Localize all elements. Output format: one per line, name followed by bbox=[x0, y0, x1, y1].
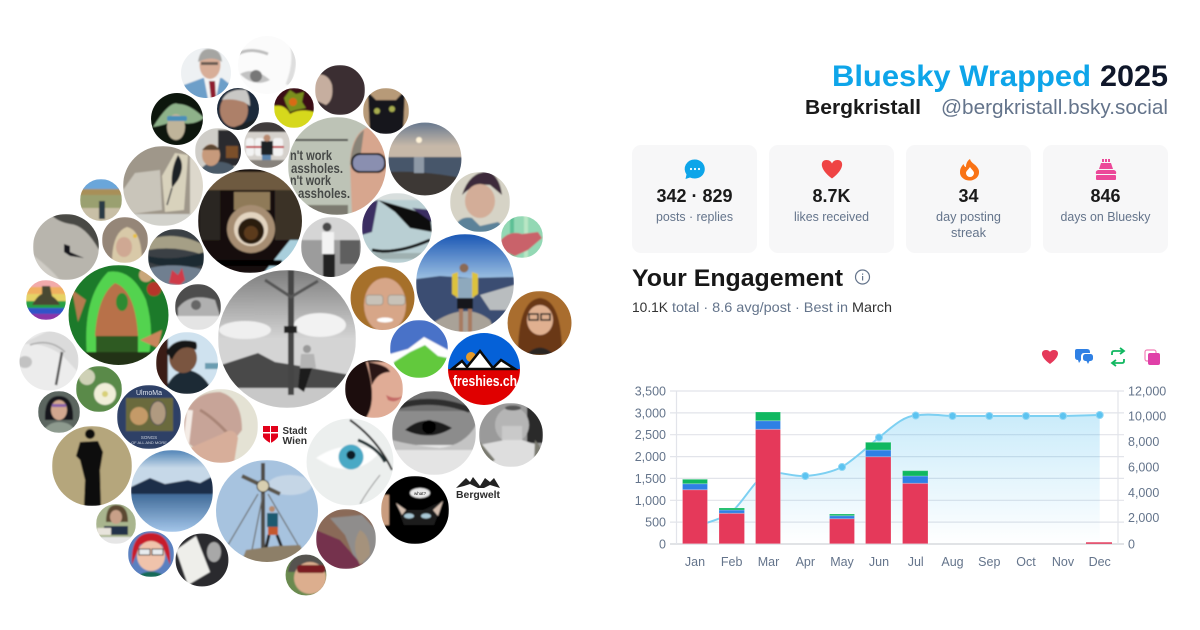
avatar: book and feather bbox=[123, 146, 204, 226]
stat value: 34 bbox=[958, 186, 978, 206]
avatar: blue eye close-up bbox=[306, 418, 394, 506]
avatar: blonde woman bbox=[102, 217, 148, 263]
avatar: summit cross black and white bbox=[218, 270, 356, 408]
avatar: hair and plaid shirt bbox=[316, 509, 376, 569]
engagement summary bbox=[632, 299, 892, 315]
avatar: climber on rock bbox=[33, 214, 99, 280]
avatar: sleeping figure bbox=[175, 284, 221, 330]
left axis labels: 2,500 bbox=[635, 428, 666, 442]
cumulative area bbox=[695, 415, 1100, 544]
stat label: day posting bbox=[936, 209, 1001, 224]
left axis labels: 0 bbox=[659, 538, 666, 552]
avatar: green christmas portrait bbox=[68, 265, 170, 367]
avatar: white roses bbox=[76, 366, 122, 412]
bar: Dec bbox=[1086, 542, 1112, 544]
avatar: curly haired man with glasses bbox=[350, 266, 416, 332]
month labels: Jul bbox=[908, 555, 924, 569]
left axis labels: 3,500 bbox=[635, 384, 666, 398]
logo: blue and green hills bbox=[390, 320, 448, 378]
avatar: monkey with mirror bbox=[117, 385, 181, 449]
stat value: 342 · 829 bbox=[656, 186, 732, 206]
engagement summary: total · 8.6 avg/post · Best in bbox=[672, 299, 848, 315]
handle: @bergkristall.bsky.social bbox=[941, 97, 1168, 119]
title year: 2025 bbox=[1100, 60, 1168, 93]
avatar: man and sign with text: n't work bbox=[290, 172, 331, 188]
right axis labels: 4,000 bbox=[1128, 486, 1159, 500]
month labels: Jun bbox=[869, 555, 889, 569]
right axis labels bbox=[1128, 384, 1166, 552]
month labels: Dec bbox=[1089, 555, 1111, 569]
avatar: black and white neck bbox=[479, 403, 543, 467]
panel: likes received bbox=[769, 145, 894, 253]
icon: replies legend bbox=[1075, 349, 1093, 364]
avatar: black cat bbox=[363, 88, 409, 134]
grid lines bbox=[670, 391, 1124, 544]
logo: Stadt Wien: Wien bbox=[282, 435, 307, 447]
avatar: black and white eye bbox=[392, 391, 476, 475]
avatar: open book and grey cat bbox=[175, 533, 229, 587]
avatar: monkey with mirror: OF ALL AND MORE bbox=[131, 440, 167, 445]
engagement summary: 10.1K bbox=[632, 299, 669, 315]
avatar: green hat bbox=[150, 92, 204, 146]
icon: quotes legend bbox=[1145, 350, 1160, 365]
avatar: man and sign with text: assholes. bbox=[291, 160, 343, 176]
heading: your engagement: Your Engagement bbox=[632, 265, 843, 292]
display name: Bergkristall bbox=[805, 97, 921, 119]
avatar: black cat with speech bubble bbox=[381, 476, 449, 544]
month labels: Apr bbox=[796, 555, 815, 569]
avatar: smiling woman bbox=[450, 172, 510, 232]
left axis labels: 500 bbox=[645, 516, 666, 530]
stat value: 846 bbox=[1090, 186, 1120, 206]
stat label second line: streak bbox=[951, 225, 986, 240]
avatar: long dark hair bbox=[315, 65, 365, 115]
panel: day posting streak bbox=[906, 145, 1031, 253]
right axis labels: 6,000 bbox=[1128, 460, 1159, 474]
icon: reposts legend bbox=[1112, 348, 1124, 366]
month labels: Nov bbox=[1052, 555, 1075, 569]
avatar: vintage camera bbox=[198, 169, 303, 275]
left axis labels: 1,000 bbox=[635, 494, 666, 508]
avatar: woman reading bbox=[96, 504, 136, 544]
avatar: older man bbox=[217, 88, 259, 130]
avatar: black cat with speech bubble: what? bbox=[414, 491, 426, 496]
avatar: man and sign with text: assholes. bbox=[298, 185, 350, 201]
avatar: rainbow flag silhouette bbox=[26, 280, 66, 320]
bar: May bbox=[830, 514, 854, 544]
right axis labels: 12,000 bbox=[1128, 384, 1166, 398]
panel: posts and replies bbox=[632, 145, 757, 253]
logo: freshies.ch: freshies.ch bbox=[453, 374, 517, 390]
chart legend bbox=[1042, 348, 1160, 366]
logo: Stadt Wien: Stadt bbox=[282, 425, 307, 437]
avatar: young man and train bbox=[195, 128, 242, 174]
title: Bluesky Wrapped bbox=[832, 60, 1091, 93]
avatar: man in blue suit bbox=[181, 48, 231, 98]
left axis labels bbox=[635, 384, 666, 552]
avatar: pale face in grey bbox=[18, 330, 79, 391]
month labels: Aug bbox=[941, 555, 964, 569]
stat label: posts · replies bbox=[656, 209, 733, 224]
avatar: man and sign with text bbox=[288, 117, 392, 215]
month labels: Feb bbox=[721, 555, 743, 569]
logo: Stadt Wien bbox=[263, 425, 307, 447]
avatar: woman on mountain bbox=[416, 234, 514, 332]
avatar: red dog drawing bbox=[501, 216, 543, 258]
avatar: monkey with mirror: SONGS bbox=[141, 435, 157, 440]
chart: monthly engagement bbox=[635, 384, 1166, 569]
logo: Bergwelt bbox=[456, 477, 500, 501]
month labels: Mar bbox=[758, 555, 779, 569]
avatar: smiling woman close-up bbox=[345, 360, 403, 418]
icon: info bbox=[856, 270, 870, 284]
avatar: cartoon woman with glasses bbox=[507, 291, 573, 357]
avatar: dark haired person by water bbox=[156, 332, 219, 394]
icon: flame bbox=[960, 159, 979, 181]
stat label: likes received bbox=[794, 209, 869, 224]
right axis labels: 10,000 bbox=[1128, 410, 1166, 424]
icon: heart bbox=[822, 160, 842, 178]
avatar: sea at sunset bbox=[388, 122, 462, 196]
left axis labels: 2,000 bbox=[635, 450, 666, 464]
avatar: red sunglasses bbox=[285, 554, 327, 596]
engagement summary: March bbox=[852, 299, 892, 315]
panel: days on Bluesky bbox=[1043, 145, 1168, 253]
avatar: eye sketch bbox=[240, 48, 296, 86]
right axis labels: 2,000 bbox=[1128, 511, 1159, 525]
avatar: yellow flower bbox=[274, 88, 314, 128]
bar: Mar bbox=[756, 412, 780, 544]
month labels bbox=[685, 555, 1111, 569]
logo: Bergwelt: Bergwelt bbox=[456, 489, 500, 501]
left axis labels: 3,000 bbox=[635, 406, 666, 420]
avatar: man at summit cross bbox=[215, 460, 319, 565]
avatar: man on seats bbox=[244, 122, 290, 168]
stat value: 8.7K bbox=[812, 186, 850, 206]
icon: speech bubble bbox=[685, 159, 705, 179]
logo: freshies.ch bbox=[448, 333, 520, 405]
avatar: man in white shirt bbox=[301, 217, 361, 278]
month labels: Jan bbox=[685, 555, 705, 569]
icon: cake bbox=[1096, 159, 1116, 180]
avatar: man and sign with text: n't work bbox=[290, 147, 332, 163]
icon: likes legend bbox=[1042, 350, 1058, 364]
avatar: woman with purple glasses bbox=[38, 391, 80, 433]
avatar: comic girl bbox=[362, 193, 432, 263]
right axis labels: 0 bbox=[1128, 538, 1135, 552]
avatar: cartoon red hair bbox=[128, 531, 174, 577]
avatar: dune walker bbox=[80, 179, 122, 222]
bar: Jul bbox=[902, 471, 928, 544]
stat label: days on Bluesky bbox=[1060, 209, 1151, 224]
month labels: Sep bbox=[978, 555, 1000, 569]
avatar: mountain lake bbox=[131, 450, 213, 532]
left axis labels: 1,500 bbox=[635, 472, 666, 486]
avatar: monkey with mirror: UlmoMa bbox=[136, 390, 162, 397]
month labels: May bbox=[830, 555, 855, 569]
cumulative line bbox=[695, 415, 1100, 527]
avatar: long shadow on ground bbox=[52, 426, 132, 506]
bar: Feb bbox=[719, 508, 744, 544]
bar: Jan bbox=[682, 479, 708, 544]
avatar: blonde pink hair from behind bbox=[184, 389, 258, 463]
line markers bbox=[802, 412, 1103, 480]
right axis labels: 8,000 bbox=[1128, 435, 1159, 449]
stacked bars bbox=[682, 412, 1112, 544]
panel: avatar bubble cluster bbox=[18, 35, 573, 596]
month labels: Oct bbox=[1016, 555, 1036, 569]
avatar: rocks and red shoes bbox=[148, 229, 204, 285]
bar: Jun bbox=[866, 442, 891, 544]
